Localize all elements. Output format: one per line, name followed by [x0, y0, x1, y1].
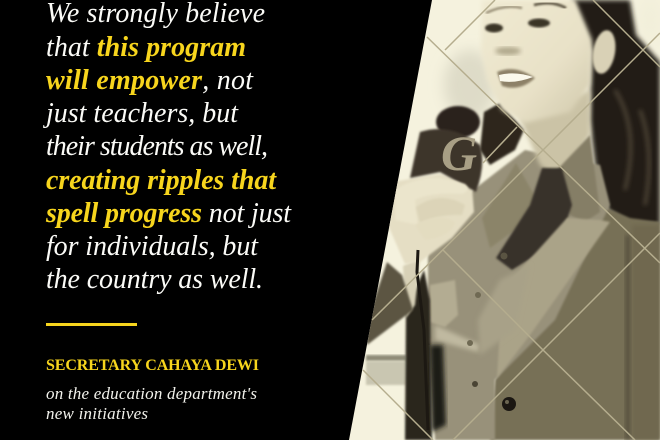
shirt opening dark	[496, 168, 572, 270]
quote text: creating ripples that	[46, 165, 277, 196]
diamond lattice lines	[363, 0, 660, 440]
nose shadow	[495, 47, 521, 55]
mouth	[497, 69, 535, 88]
sleeve	[367, 262, 413, 345]
quote text: their students as well,	[46, 131, 268, 162]
suit jacket	[490, 205, 660, 440]
attribution description	[46, 384, 257, 423]
attribution description: new initiatives	[46, 404, 148, 423]
hand lower	[388, 174, 474, 264]
quote text: the country as well.	[46, 264, 263, 295]
attribution name: SECRETARY CAHAYA DEWI	[46, 357, 259, 374]
ear	[592, 28, 618, 76]
microphone cable	[417, 250, 428, 430]
fingers	[394, 179, 469, 200]
lapel	[497, 218, 610, 378]
jacket button	[502, 397, 516, 411]
quote text: just teachers, but	[43, 98, 239, 129]
microphone	[410, 106, 482, 192]
dark inner jacket panel	[405, 270, 432, 440]
quote text: spell progress not just	[45, 198, 292, 229]
shirt pocket	[430, 280, 458, 327]
quote text	[43, 0, 292, 295]
photo panel: woman speaking into microphone	[340, 0, 660, 440]
attribution description: on the education department's	[46, 384, 257, 403]
yellow divider rule	[46, 323, 137, 326]
microphone: G	[441, 125, 477, 181]
neck	[520, 90, 590, 180]
blurred background	[442, 48, 494, 118]
quote text: will empower, not	[46, 65, 254, 96]
face	[481, 0, 592, 123]
shirt	[428, 150, 610, 440]
collar	[482, 164, 533, 247]
quote text: that this program	[46, 32, 246, 63]
quote text: for individuals, but	[46, 231, 259, 262]
eyebrows and eyes	[486, 7, 522, 13]
hair	[572, 0, 660, 225]
